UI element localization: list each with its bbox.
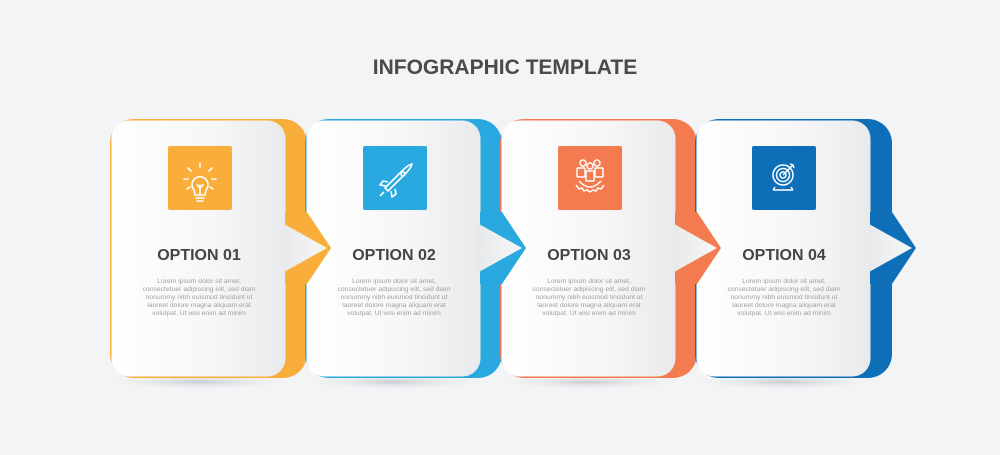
text 1: nonummy nibh euismod tincidunt ut: [146, 294, 253, 301]
heading 1: OPTION 01: [157, 247, 241, 264]
text 1: volutpat. Ut wisi enim ad minim: [152, 310, 246, 317]
card 2: [305, 119, 502, 378]
text 2: laoreet dolore magna aliquam erat: [342, 302, 446, 309]
text 3: volutpat. Ut wisi enim ad minim: [542, 310, 636, 317]
text 4: consectetuer adipiscing elit, sed diam: [728, 286, 841, 293]
text 1: consectetuer adipiscing elit, sed diam: [143, 286, 256, 293]
title: INFOGRAPHIC TEMPLATE: [373, 56, 637, 79]
text 2: consectetuer adipiscing elit, sed diam: [338, 286, 451, 293]
text 3: laoreet dolore magna aliquam erat: [537, 302, 641, 309]
text 4: Lorem ipsum dolor sit amet,: [742, 278, 826, 285]
text 2: Lorem ipsum dolor sit amet,: [352, 278, 436, 285]
card 3: [500, 119, 697, 378]
text 2: nonummy nibh euismod tincidunt ut: [341, 294, 448, 301]
text 4: volutpat. Ut wisi enim ad minim: [737, 310, 831, 317]
arrows: [284, 212, 916, 284]
text 4: nonummy nibh euismod tincidunt ut: [731, 294, 838, 301]
heading 3: OPTION 03: [547, 247, 631, 264]
heading 4: OPTION 04: [742, 247, 826, 264]
text 4: laoreet dolore magna aliquam erat: [732, 302, 836, 309]
card 4: [695, 119, 892, 378]
icon: rocket: [363, 146, 427, 210]
shadows: [100, 374, 885, 390]
text 1: Lorem ipsum dolor sit amet,: [157, 278, 241, 285]
text 3: nonummy nibh euismod tincidunt ut: [536, 294, 643, 301]
text 3: Lorem ipsum dolor sit amet,: [547, 278, 631, 285]
text 3: consectetuer adipiscing elit, sed diam: [533, 286, 646, 293]
icon: target: [752, 146, 816, 210]
icon: team: [558, 146, 622, 210]
text 2: volutpat. Ut wisi enim ad minim: [347, 310, 441, 317]
text 1: laoreet dolore magna aliquam erat: [147, 302, 251, 309]
card 1: [110, 119, 307, 378]
heading 2: OPTION 02: [352, 247, 436, 264]
icon: light bulb: [168, 146, 232, 210]
